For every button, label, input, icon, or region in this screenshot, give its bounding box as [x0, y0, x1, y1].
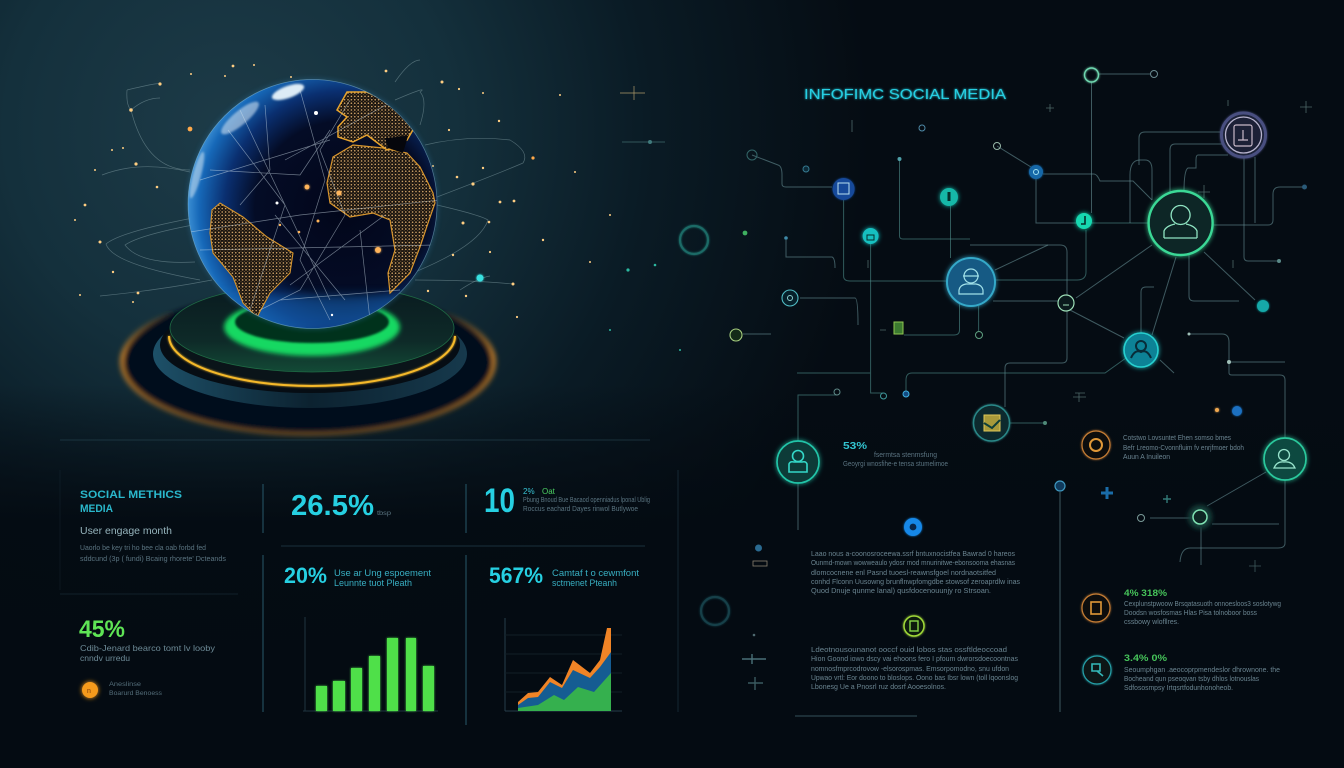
small left side icons	[742, 544, 767, 690]
stat: 10: Roccus eachard Dayes rinwol Butlywoe	[523, 506, 638, 513]
callout: orange ring stat	[1082, 588, 1281, 626]
globe orbits and scattered data points	[74, 60, 611, 318]
node: left user with 53% stat: Geoyrgi wnosfihe-e tensa stumelimoe	[843, 461, 948, 468]
stat: 20%: Use ar Ung espoement	[334, 568, 431, 579]
title: INFOFIMC SOCIAL MEDIA	[804, 87, 1006, 103]
node: purple device	[1222, 113, 1266, 157]
icon: green-yellow badge	[904, 616, 924, 636]
orange glow ring	[122, 290, 494, 434]
stat: 567%	[489, 563, 639, 589]
ring: lower middle	[701, 597, 729, 625]
stat: 45%: 45%	[79, 616, 125, 643]
green light ring	[224, 298, 400, 356]
callout: orange ring text: Auun A Inuileon	[1123, 452, 1170, 461]
globe pedestal	[122, 284, 494, 434]
area chart	[505, 618, 622, 711]
panel: social metrics intro	[80, 489, 227, 563]
icon: orange coin with caption: Boarurd Benoess	[109, 691, 162, 697]
small app nodes	[730, 68, 1307, 425]
blue series	[518, 652, 611, 711]
text block: paragraph two: Upwao vrtl: Eor doono to bloslops. Oono bas Ibsr lown (toll lqoonslog	[811, 673, 1018, 682]
text block: paragraph one: Quod Dnuje qunme lanal) qusfdocenouunjy ro Strsoan.	[811, 586, 991, 595]
small ring node with plus marks	[1055, 481, 1261, 572]
stat: 567%: sctmenet Pteanh	[552, 578, 617, 589]
network lines over globe	[190, 90, 440, 320]
polar ice patches	[187, 81, 306, 199]
stat: 26.5%: 26.5%	[291, 490, 374, 522]
stat: 45%: cnndv urredu	[80, 653, 130, 663]
text block: paragraph one: conhd Flconn Uusowng brunflnwpfomgdbe stowsof zeroaprdlw inas	[811, 577, 1020, 586]
node: blue user	[947, 258, 995, 306]
icon: glowing blue badge	[904, 518, 922, 536]
continent: Africa	[327, 145, 435, 293]
stat: 10: 2%	[523, 487, 535, 496]
stat: 20%: Leunnte tuot Pleath	[334, 578, 412, 589]
callout: orange ring stat: Cexplunstpwoow Brsqatasuoth onnoesloos3 soslotywg	[1124, 599, 1281, 608]
text block: paragraph two: Ldeotnousounanot ooccf ouid lobos stas ossftldeoccoad	[811, 645, 1007, 654]
node: right user	[1264, 438, 1306, 480]
callout: orange ring stat: Doodsn wosfosmas Hlas Pisa tolnoboor boss	[1124, 608, 1257, 617]
icon: orange coin with caption: Aneslinse	[109, 682, 142, 688]
text block: paragraph one	[811, 549, 1020, 595]
callout: orange ring text: Befr Lreomo-Cvonnfluim fv enrjfmoer bdoh	[1123, 443, 1244, 452]
text block: paragraph two: Hion Goond iowo dscy vai ehoons fero I pfoum dwrorsdoecoontnas	[811, 654, 1018, 663]
callout: cyan ring stat	[1083, 653, 1280, 692]
stat: 567%: Camtaf t o cewmfont	[552, 568, 639, 579]
icon: orange coin with caption	[82, 682, 162, 698]
globe	[186, 78, 440, 330]
heading: SOCIAL METHICS	[80, 489, 182, 501]
green series	[518, 673, 611, 711]
callout: orange ring stat: 4% 318%	[1124, 588, 1168, 599]
panel: social metrics intro: sddcund (3p ( fundi) Bcaing rhorete' Dcteands	[80, 556, 227, 563]
node: message card	[974, 405, 1010, 441]
upper disc with yellow rim	[169, 286, 455, 386]
callout: cyan ring stat: Sdfososmpsy Irtqsrtfodunhonoheob.	[1124, 683, 1233, 692]
orange series	[518, 628, 611, 711]
stat: 20%	[284, 563, 431, 589]
text block: paragraph one: Laao nous a-coonosroceewa.ssrf bntuxnocistfea Bawrad 0 hareos	[811, 549, 1015, 558]
continent: Europe	[337, 92, 417, 150]
text block: paragraph one: dlomcocnene enl Pasnd tuoesl-reawnsfgoel nordnaotsitfed	[811, 568, 996, 577]
stat: 26.5%: tbsp	[377, 511, 392, 517]
description: Uaorlo be key tri ho bee cla oab forbd fed	[80, 545, 206, 552]
text block: paragraph two	[811, 645, 1018, 691]
stat: 10: Oat	[542, 487, 556, 496]
continent: South America	[210, 203, 293, 317]
node: left user with 53% stat: 53%	[843, 441, 867, 452]
stat: 45%: Cdib-Jenard bearco tomt lv looby	[80, 643, 216, 653]
icon: orange coin with caption: n	[87, 688, 91, 695]
callout: orange ring stat: cssbowy wlofllres.	[1124, 617, 1179, 626]
stat: 10: 10	[484, 482, 515, 520]
stat: 10	[484, 482, 650, 520]
stat: 20%: 20%	[284, 563, 327, 588]
centre decorative sparks and rings	[609, 86, 1312, 625]
node: left user with 53% stat: fsermtsa stenmsfung	[874, 452, 937, 459]
text block: paragraph one: Ounmd-mown wowweaulo ydosr mod mnurinitwe-ebonsooma ehasnas	[811, 558, 1015, 567]
lower disc	[153, 300, 467, 408]
stat: 10: Pbung Bnoud Bue Bacaod openniadus lponal Ublig	[523, 497, 650, 504]
stat: 45%	[79, 616, 216, 663]
callout: cyan ring stat: Seoumphgan .aeocoprpmendeslor dhrownone. the	[1124, 665, 1280, 674]
stat: 567%: 567%	[489, 563, 543, 588]
panel: social metrics intro: MEDIA	[80, 503, 113, 515]
text block: paragraph two: nomnosfmprcodrovow -elsorospmas. Emsorpomodno, snu ufdon	[811, 664, 1009, 673]
node: cyan group	[1124, 333, 1158, 367]
node: left user with 53% stat	[777, 441, 948, 483]
left divider lines	[60, 440, 678, 725]
ring: middle	[680, 226, 708, 254]
subheading: User engage month	[80, 525, 172, 537]
network connection lines	[743, 74, 1303, 716]
callout: orange ring text	[1082, 431, 1244, 461]
callout: cyan ring stat: 3.4% 0%	[1124, 653, 1168, 664]
callout: cyan ring stat: Bocheand qun pseoqvan tsby dhlos lotnouslas	[1124, 674, 1259, 683]
callout: orange ring text: Cotstwo Lovsuntet Ehen somso bmes	[1123, 433, 1231, 442]
text block: paragraph two: Lbonesg Ue a Pnosrl ruz dosrf Aooesolnos.	[811, 682, 946, 691]
bar chart	[303, 617, 438, 711]
node: main user	[1149, 191, 1213, 255]
